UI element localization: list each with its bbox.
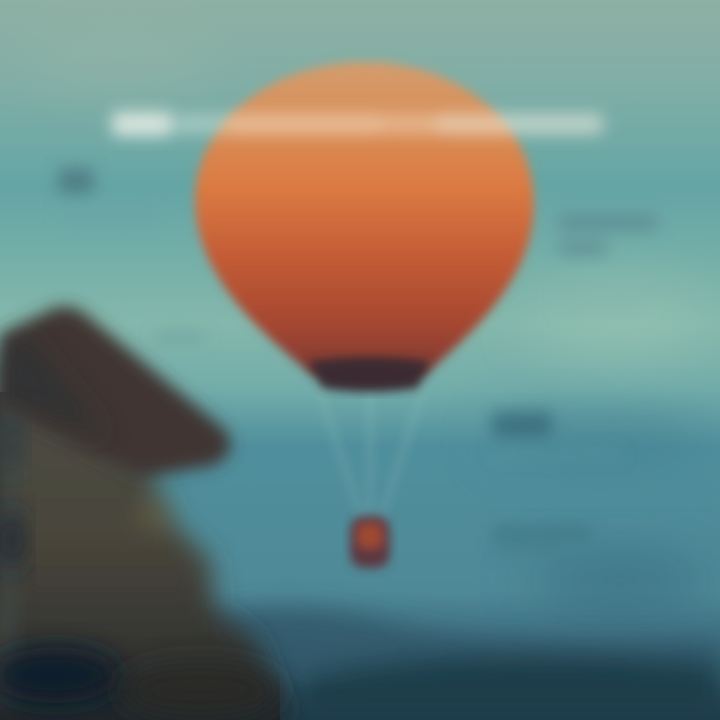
bottom right text block [492,526,592,554]
balloon base band [308,357,430,392]
balloon ropes [318,385,425,520]
roof shadow [0,335,110,440]
distant hills [190,608,720,720]
house roof [0,306,231,478]
right upper text block [558,214,678,313]
left text block [58,168,205,342]
bottom edge shading [260,680,720,720]
title bar [112,112,603,136]
bottom rock edge shading [0,670,280,720]
left edge shading [0,392,28,720]
balloon basket [350,516,390,568]
right lower text block [492,412,622,458]
hot air balloon envelope [195,62,534,392]
house on cliff [0,306,290,720]
house wall and rock [0,360,290,720]
dark foreground rocks [0,647,120,703]
